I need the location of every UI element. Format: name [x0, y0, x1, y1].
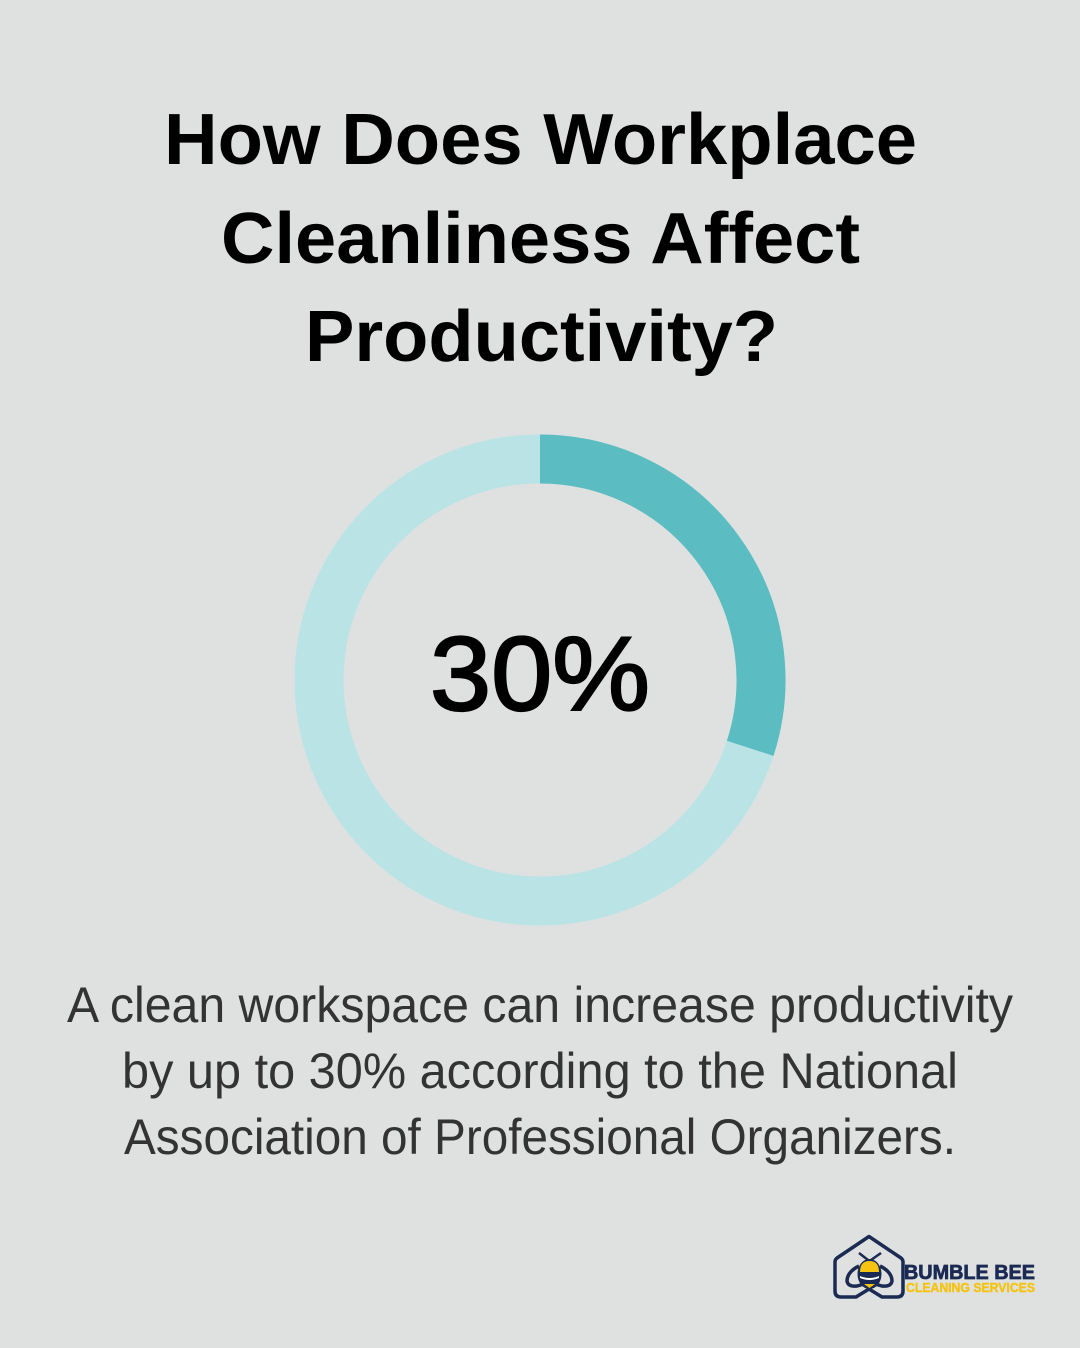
- body text: [67, 977, 1013, 1165]
- icon: house with bee: [835, 1236, 903, 1297]
- brand tagline: CLEANING SERVICES: [906, 1281, 1035, 1295]
- title: Cleanliness Affect: [221, 199, 860, 279]
- brand name: BUMBLE BEE: [904, 1262, 1035, 1284]
- body text: Association of Professional Organizers.: [124, 1109, 956, 1165]
- donut value: 30%: [430, 616, 650, 733]
- body text: A clean workspace can increase productivity: [67, 977, 1013, 1033]
- donut chart: 30%: [319, 459, 761, 901]
- title: Productivity?: [305, 297, 778, 377]
- logo: Bumble Bee Cleaning Services: [835, 1236, 1035, 1297]
- body text: by up to 30% according to the National: [122, 1043, 958, 1099]
- title: How Does Workplace: [164, 100, 917, 180]
- title: [164, 100, 917, 377]
